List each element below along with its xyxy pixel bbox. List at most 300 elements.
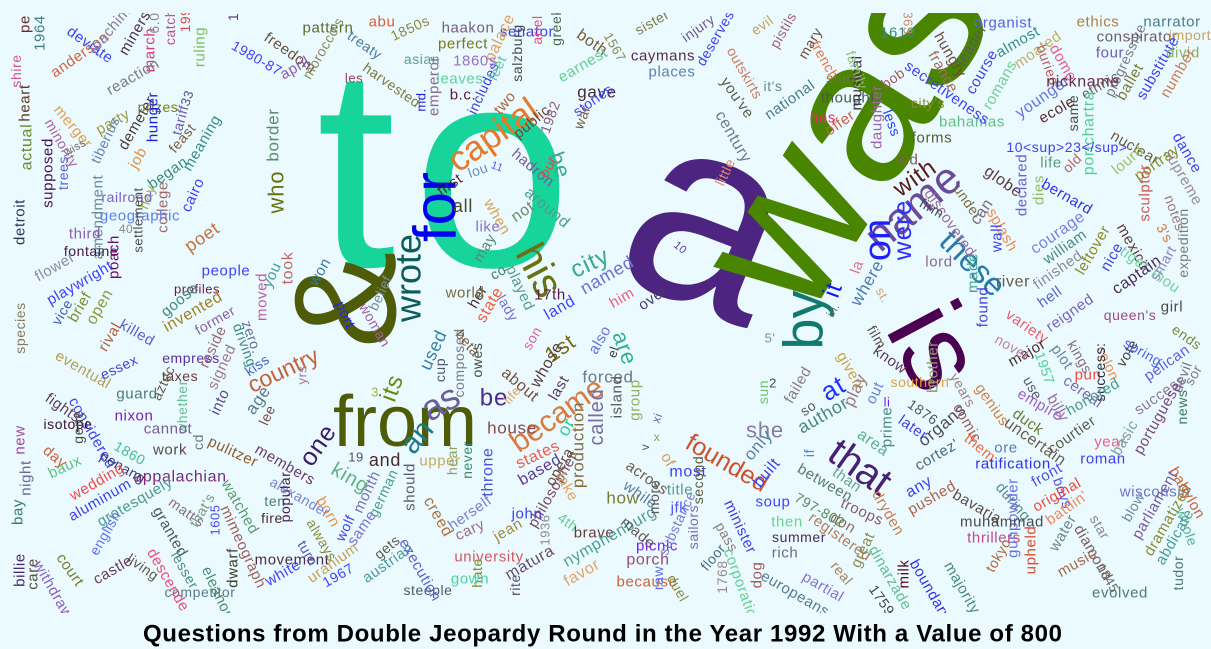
small words: hungry bbox=[930, 29, 970, 81]
small words: cary bbox=[452, 516, 488, 544]
small words: real bbox=[828, 558, 856, 588]
small words: treaty bbox=[345, 27, 385, 63]
small words: area bbox=[854, 426, 892, 460]
small words: isotope bbox=[43, 416, 93, 432]
small words: floor bbox=[697, 540, 729, 574]
small words: 3's bbox=[1153, 221, 1177, 245]
small words: lourd bbox=[1109, 142, 1147, 178]
small words: shire bbox=[8, 54, 24, 88]
small words: april bbox=[277, 53, 313, 83]
small words: harvested bbox=[360, 59, 424, 111]
small words: may bbox=[470, 231, 500, 265]
small words: freedom bbox=[261, 29, 319, 77]
small words: wall bbox=[988, 224, 1006, 253]
small words: zero. bbox=[239, 318, 265, 356]
small words: appalachian bbox=[133, 468, 227, 486]
small words: how bbox=[606, 488, 640, 508]
small words: around bbox=[521, 184, 573, 232]
small words: expedition bbox=[1175, 208, 1191, 278]
small words: bahamas bbox=[939, 114, 1005, 130]
small words: settlement bbox=[130, 187, 146, 253]
small words: of bbox=[657, 450, 679, 470]
small words: house bbox=[487, 418, 537, 438]
small words: river bbox=[996, 274, 1030, 290]
small words: aluminum bbox=[66, 475, 134, 525]
small words: during bbox=[992, 479, 1034, 525]
small words: empire bbox=[1014, 385, 1066, 425]
small words: signed bbox=[204, 342, 240, 392]
small words: sun bbox=[755, 380, 771, 404]
small words: partial bbox=[799, 568, 847, 606]
small words: under bbox=[950, 182, 986, 222]
small words: portray bbox=[1131, 141, 1183, 185]
small words: miners bbox=[115, 8, 155, 58]
small words: railroad bbox=[101, 189, 153, 205]
small words: always bbox=[304, 516, 340, 564]
small words: 363 bbox=[900, 11, 916, 35]
small words: can bbox=[967, 196, 997, 228]
small words: across bbox=[623, 457, 671, 499]
small words: outskirts bbox=[724, 44, 766, 102]
small words: nuclear bbox=[1108, 127, 1162, 169]
small words: all bbox=[453, 196, 473, 216]
small words: guard bbox=[116, 386, 158, 402]
small words: babylon bbox=[1165, 464, 1209, 522]
small words: sister bbox=[632, 6, 672, 38]
small words: 2 bbox=[769, 376, 777, 390]
small words: music bbox=[1054, 545, 1100, 581]
small words: movement bbox=[255, 552, 330, 568]
small words: age bbox=[241, 382, 275, 418]
small words: notes bbox=[1161, 193, 1189, 233]
word: capital: capital bbox=[440, 90, 546, 180]
small words: film bbox=[864, 323, 890, 351]
small words: then bbox=[771, 514, 803, 530]
small words: into bbox=[207, 386, 233, 418]
small words: years bbox=[947, 370, 979, 410]
small words: with bbox=[887, 154, 942, 203]
small words: played bbox=[502, 263, 538, 313]
small words: should bbox=[402, 463, 418, 511]
small words: essex bbox=[98, 351, 140, 383]
small words: captain bbox=[1109, 252, 1165, 298]
small words: evil bbox=[748, 12, 776, 38]
small words: picnic bbox=[636, 538, 678, 554]
small words: year bbox=[1094, 434, 1126, 450]
small words: merger bbox=[50, 102, 96, 152]
small words: rich bbox=[772, 544, 798, 562]
word: ampersand: & bbox=[264, 252, 426, 348]
small words: li bbox=[884, 394, 890, 410]
small words: she bbox=[746, 418, 784, 442]
small words: took bbox=[280, 251, 296, 284]
small words: colon bbox=[1093, 343, 1123, 383]
small words: month bbox=[350, 468, 384, 516]
small words: uranium bbox=[304, 539, 362, 587]
small words: and bbox=[369, 450, 401, 470]
small words: hate bbox=[469, 558, 485, 588]
small words: never bbox=[459, 441, 475, 479]
small words: life bbox=[1040, 154, 1062, 172]
small words: third bbox=[69, 226, 101, 242]
word: from: from bbox=[333, 382, 477, 462]
small words: job bbox=[125, 144, 151, 173]
small words: 1605 bbox=[208, 504, 222, 536]
word: to: o bbox=[413, 9, 571, 327]
small words: group bbox=[626, 379, 644, 421]
small words: used bbox=[415, 327, 451, 373]
small words: gene bbox=[70, 410, 86, 444]
small words: substance bbox=[655, 488, 699, 558]
small words: courage bbox=[1028, 208, 1088, 258]
small words: catch bbox=[162, 9, 178, 45]
small words: or bbox=[553, 414, 579, 440]
small words: penang bbox=[97, 448, 149, 486]
small words: 33 bbox=[177, 88, 197, 108]
small words: caymans bbox=[631, 48, 695, 64]
small words: salzburg bbox=[509, 24, 525, 82]
word: these: these bbox=[933, 223, 1013, 303]
small words: 3 bbox=[371, 384, 379, 400]
small words: public bbox=[510, 102, 554, 142]
small words: ballet bbox=[1113, 60, 1147, 103]
small words: withdraw bbox=[29, 557, 76, 622]
small words: hunger bbox=[144, 92, 162, 142]
small words: kiss bbox=[242, 351, 272, 379]
small words: dryden bbox=[868, 487, 908, 539]
small words: news bbox=[1174, 390, 1190, 424]
small words: portuguese bbox=[1130, 379, 1186, 457]
small words: states bbox=[513, 437, 563, 473]
small words: portchartra bbox=[1080, 91, 1098, 175]
small words: honored bbox=[1063, 375, 1123, 419]
small words: city's bbox=[911, 95, 945, 111]
small words: people bbox=[202, 262, 250, 280]
small words: firm bbox=[917, 195, 947, 221]
small words: emperor bbox=[426, 56, 442, 116]
small words: summer bbox=[772, 529, 826, 545]
small words: mary bbox=[795, 25, 825, 61]
small words: number bbox=[1157, 45, 1199, 101]
small words: austrian bbox=[359, 539, 417, 587]
small words: about bbox=[498, 365, 542, 405]
small words: almost bbox=[993, 23, 1043, 61]
small words: success bbox=[1131, 371, 1189, 419]
small words: 5' bbox=[765, 330, 775, 346]
small words: new bbox=[12, 425, 28, 455]
small words: author bbox=[794, 392, 852, 438]
small words: places bbox=[649, 64, 695, 80]
small words: title bbox=[667, 482, 693, 498]
small words: national bbox=[762, 77, 818, 123]
small words: substitute bbox=[1133, 33, 1183, 103]
small words: named bbox=[577, 252, 637, 298]
small words: port bbox=[331, 299, 359, 332]
small words: be bbox=[480, 384, 508, 412]
small words: old bbox=[1059, 150, 1085, 176]
small words: cereal bbox=[1060, 372, 1106, 412]
small words: finished bbox=[1030, 247, 1086, 293]
small words: march bbox=[142, 28, 158, 72]
small words: gunpowder bbox=[1004, 478, 1022, 558]
small words: courtier bbox=[1045, 412, 1099, 458]
small words: found bbox=[974, 287, 992, 327]
small words: raw bbox=[650, 566, 666, 590]
small words: original bbox=[1030, 474, 1084, 516]
small words: whether bbox=[174, 380, 190, 435]
small words: duck bbox=[1009, 405, 1047, 439]
small words: vote bbox=[1113, 337, 1141, 369]
small words: 199 bbox=[177, 7, 193, 33]
small words: college bbox=[154, 181, 172, 233]
small words: four bbox=[1096, 44, 1124, 62]
small words: diamond bbox=[1070, 522, 1116, 584]
small words: than bbox=[829, 464, 865, 496]
small words: stories bbox=[570, 80, 616, 120]
small words: german bbox=[365, 467, 401, 519]
small words: md. bbox=[414, 88, 428, 112]
small words: her bbox=[465, 283, 491, 311]
small words: narrator bbox=[1143, 14, 1201, 30]
small words: grotesquely bbox=[94, 474, 176, 530]
small words: hadron bbox=[508, 145, 558, 191]
small words: french bbox=[808, 38, 842, 82]
small words: rite bbox=[507, 574, 523, 596]
small words: porch bbox=[626, 552, 670, 568]
small words: popular bbox=[277, 472, 293, 522]
small words: most bbox=[669, 464, 707, 480]
small words: in. bbox=[823, 300, 843, 320]
small words: supposed bbox=[40, 138, 56, 208]
small words: x bbox=[654, 430, 660, 444]
small words: prime bbox=[878, 407, 896, 447]
small words: buried bbox=[1033, 42, 1063, 88]
small words: forced bbox=[582, 368, 634, 386]
word: as: as bbox=[413, 375, 467, 429]
small words: dome bbox=[1046, 41, 1080, 85]
small words: 1567 bbox=[601, 30, 629, 64]
small words: that's bbox=[186, 490, 218, 530]
small words: leaves bbox=[437, 70, 483, 88]
small words: brave bbox=[574, 524, 614, 542]
small words: favor bbox=[561, 556, 603, 590]
small words: co bbox=[487, 261, 509, 283]
small words: you've bbox=[717, 74, 757, 122]
small words: jean bbox=[490, 515, 526, 546]
word: founded: founded bbox=[681, 428, 773, 498]
small words: mexico bbox=[1113, 221, 1153, 273]
small words: any bbox=[903, 473, 935, 501]
small words: english bbox=[86, 508, 124, 558]
small words: moated bbox=[1011, 28, 1065, 72]
small words: star bbox=[1087, 512, 1113, 542]
small words: matura bbox=[503, 542, 557, 584]
small words: dog bbox=[748, 562, 766, 588]
small words: offer bbox=[822, 107, 858, 139]
small words: 1860 bbox=[112, 438, 148, 468]
small words: 1768 bbox=[714, 560, 730, 594]
small words: meaning bbox=[179, 112, 225, 174]
small words: course bbox=[962, 47, 1002, 97]
small words: dance bbox=[1169, 130, 1205, 176]
small words: has bbox=[810, 110, 836, 126]
small words: france bbox=[924, 48, 962, 96]
small words: rival bbox=[95, 320, 125, 354]
small words: organist bbox=[974, 14, 1032, 32]
small words: feet bbox=[484, 53, 510, 83]
small words: great bbox=[847, 529, 879, 570]
small words: ten bbox=[264, 493, 286, 509]
small words: first bbox=[434, 170, 466, 200]
small words: so bbox=[797, 397, 819, 419]
small words: ore bbox=[994, 440, 1018, 456]
small words: be bbox=[544, 148, 576, 182]
small words: 1967 bbox=[320, 560, 356, 590]
small words: little bbox=[712, 156, 738, 188]
small words: ethics bbox=[1077, 14, 1119, 30]
small words: competitor bbox=[165, 584, 235, 600]
small words: xi bbox=[649, 411, 665, 425]
word: on: on bbox=[857, 219, 899, 261]
small words: watched bbox=[217, 476, 262, 537]
small words: ariel bbox=[529, 15, 545, 45]
small words: globe bbox=[981, 163, 1025, 201]
small words: thought bbox=[821, 90, 875, 106]
small words: battlin' bbox=[1043, 487, 1091, 529]
small words: heart bbox=[16, 84, 34, 122]
small words: matt's bbox=[166, 494, 208, 530]
small words: began bbox=[145, 153, 191, 193]
small words: know bbox=[870, 342, 910, 378]
small words: deserves bbox=[693, 7, 737, 69]
small words: jfk bbox=[670, 500, 687, 516]
small words: william bbox=[1039, 226, 1090, 269]
small words: leader bbox=[953, 21, 991, 69]
small words: geographic bbox=[100, 208, 180, 224]
small words: 17th bbox=[534, 286, 566, 304]
word: a: a bbox=[586, 47, 840, 383]
small words: hell bbox=[1035, 283, 1065, 311]
small words: don bbox=[827, 509, 859, 537]
small words: front bbox=[1028, 459, 1066, 491]
small words: eleanor bbox=[198, 564, 236, 620]
small words: same bbox=[344, 507, 380, 549]
word: for: for bbox=[402, 172, 468, 242]
small words: pe bbox=[16, 15, 34, 33]
small words: sailors bbox=[685, 505, 701, 549]
small words: production bbox=[568, 402, 588, 488]
small words: trees bbox=[55, 156, 71, 190]
small words: progressive bbox=[1101, 21, 1149, 99]
small words: leftover bbox=[1072, 222, 1114, 278]
small words: cairo bbox=[178, 175, 208, 215]
small words: smart bbox=[1147, 243, 1179, 283]
small words: uncertain bbox=[1001, 415, 1069, 469]
small words: roman bbox=[1080, 450, 1126, 468]
small words: whose bbox=[527, 339, 567, 392]
small words: at bbox=[815, 369, 851, 407]
small words: poach bbox=[106, 235, 122, 279]
small words: storm bbox=[826, 70, 864, 86]
small words: girl bbox=[1161, 298, 1183, 316]
small words: use bbox=[1020, 373, 1046, 403]
word: wrote: wrote bbox=[388, 234, 428, 323]
small words: 6.0 bbox=[146, 12, 162, 34]
small words: belief bbox=[365, 273, 395, 313]
small words: bernard bbox=[1039, 176, 1095, 218]
small words: living bbox=[124, 550, 162, 584]
small words: land bbox=[542, 292, 578, 324]
small words: over bbox=[635, 282, 671, 314]
small words: beta bbox=[452, 327, 484, 359]
small words: gown bbox=[451, 570, 489, 588]
small words: thrillers bbox=[967, 530, 1021, 546]
small words: one bbox=[294, 419, 342, 471]
small words: novel bbox=[992, 331, 1032, 363]
small words: both bbox=[573, 26, 611, 60]
small words: out bbox=[536, 154, 560, 180]
small words: gets bbox=[371, 532, 403, 562]
small words: less bbox=[880, 108, 904, 138]
small words: spring bbox=[1121, 335, 1165, 369]
word: became: became bbox=[504, 371, 610, 459]
small words: discovered bbox=[921, 186, 979, 260]
small words: 1850s bbox=[388, 12, 432, 44]
small words: it's bbox=[764, 78, 782, 94]
small words: mimeograph bbox=[216, 503, 270, 591]
small words: when bbox=[480, 195, 514, 238]
small words: yrs bbox=[294, 366, 310, 384]
small words: party bbox=[93, 106, 133, 138]
small words: 1957 bbox=[1032, 350, 1058, 386]
small words: throne bbox=[480, 447, 496, 497]
small words: 10<sup>23</sup> bbox=[1006, 139, 1128, 155]
small words: poet bbox=[181, 218, 223, 256]
small words: while bbox=[619, 477, 660, 513]
small words: divid bbox=[1166, 44, 1200, 62]
small words: joachim bbox=[85, 3, 134, 58]
small words: them bbox=[961, 430, 999, 466]
small words: lord bbox=[925, 254, 953, 270]
small words: wisconsin bbox=[1119, 484, 1190, 500]
word: name: name bbox=[855, 153, 971, 261]
small words: 1845 bbox=[1094, 561, 1122, 595]
small words: playwright bbox=[44, 257, 116, 309]
small words: 19 bbox=[348, 450, 364, 464]
small words: major bbox=[1005, 336, 1049, 370]
small words: forms bbox=[912, 130, 952, 146]
small words: boys bbox=[1050, 475, 1076, 511]
small words: herself bbox=[445, 492, 495, 534]
small words: daughter bbox=[868, 85, 886, 149]
small words: 1876 bbox=[905, 396, 941, 428]
small words: import bbox=[1169, 27, 1211, 43]
small words: perfect bbox=[438, 36, 488, 52]
small words: alexander bbox=[267, 473, 333, 521]
small words: palace bbox=[482, 11, 518, 65]
small words: 1980-87 bbox=[229, 37, 285, 79]
small words: wiss bbox=[61, 137, 88, 159]
small words: parliament bbox=[1129, 468, 1181, 542]
small words: considered bbox=[65, 394, 119, 472]
small words: musical bbox=[848, 55, 866, 111]
small words: variety bbox=[1002, 306, 1052, 348]
small words: bob bbox=[878, 64, 908, 92]
small words: pun bbox=[1075, 366, 1101, 384]
small words: king bbox=[327, 459, 373, 497]
small words: pushed bbox=[905, 477, 959, 519]
small words: flower bbox=[32, 249, 78, 285]
